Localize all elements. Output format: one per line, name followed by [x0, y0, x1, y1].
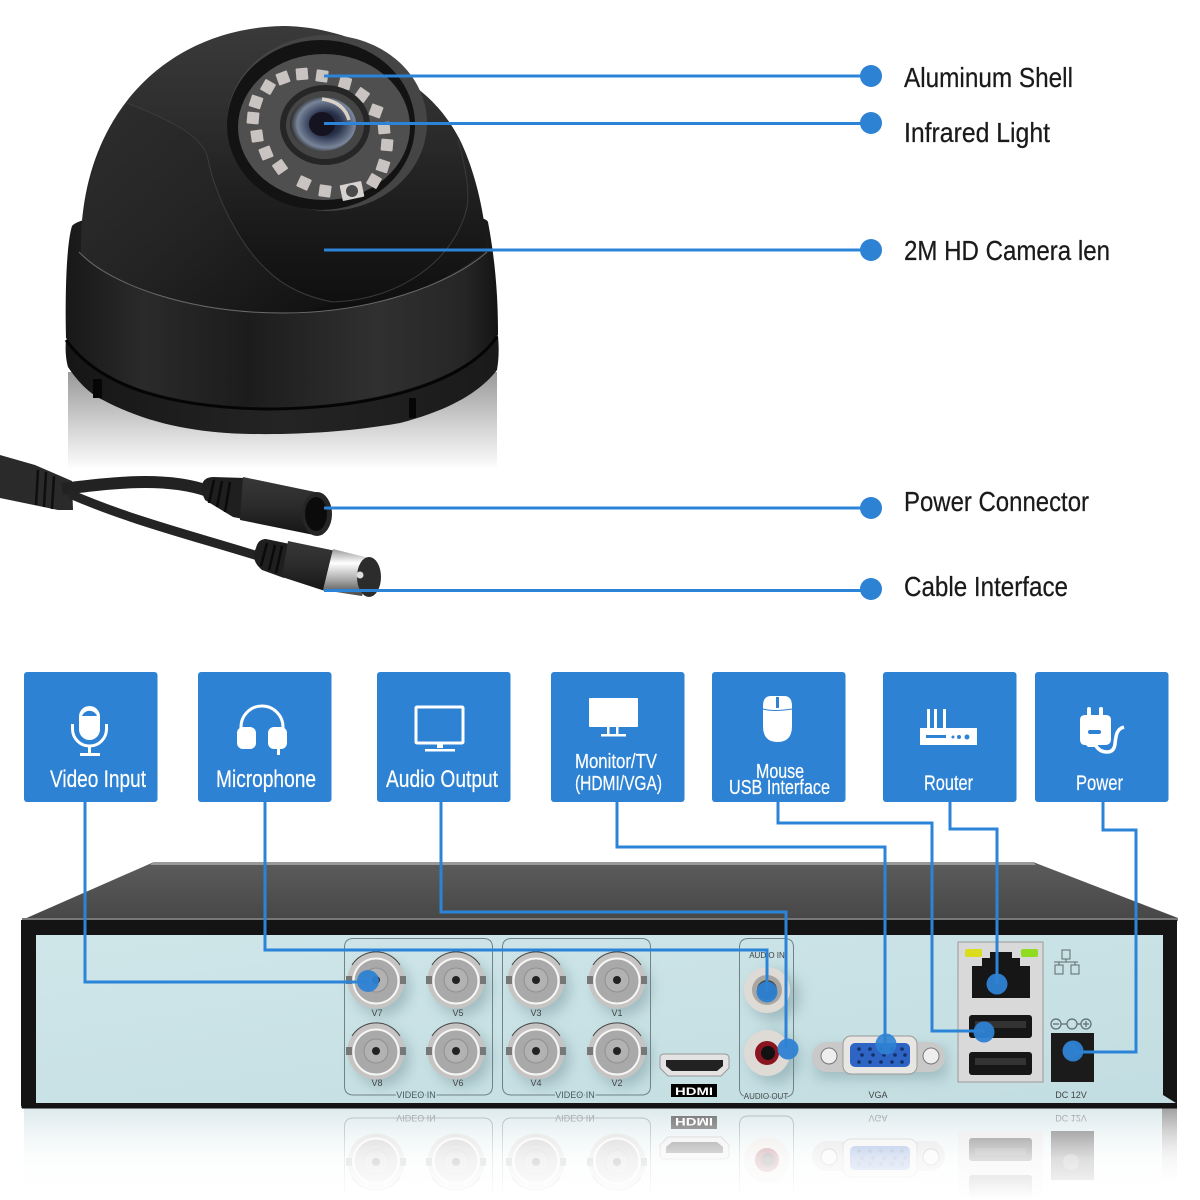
- DVR reflection: [21, 1106, 1177, 1190]
- camera base: [66, 336, 499, 434]
- DVR reflection: VIDEO IN: [555, 1113, 595, 1123]
- label: monitor/TV: Monitor/TV: [575, 751, 658, 773]
- DVR port labels: V8: [371, 1078, 383, 1088]
- camera lens: [280, 85, 370, 165]
- DVR lower ports: [344, 1014, 1094, 1097]
- DVR port labels: V3: [530, 1008, 542, 1018]
- panel: router: [883, 672, 1016, 802]
- power connector: [202, 477, 332, 536]
- panel: video input: [24, 672, 158, 802]
- BNC connector: [254, 539, 381, 597]
- camera infrared LEDs: [246, 67, 394, 198]
- DVR back panel: [36, 935, 1176, 1103]
- leader lines: [324, 76, 871, 590]
- DC polarity symbol: [1051, 1019, 1091, 1029]
- icon: headphones: [237, 706, 287, 755]
- label: camera lens: 2M HD Camera len: [904, 235, 1110, 266]
- DVR reflection: HDMI: [675, 1115, 713, 1127]
- panel: power: [1035, 672, 1168, 802]
- icon: plug: [1080, 707, 1124, 752]
- network icon: [1054, 950, 1079, 974]
- label: audio output: Audio Output: [386, 766, 498, 793]
- DVR port labels: HDMI: [675, 1086, 713, 1098]
- label: router: Router: [924, 772, 973, 795]
- label: mouse USB interface: Mouse: [756, 761, 804, 783]
- cable assembly: [0, 455, 381, 597]
- connection dots: [357, 970, 1084, 1062]
- DVR port labels: V1: [611, 1008, 623, 1018]
- DVR back frame: [21, 920, 1177, 1108]
- DVR port labels: VIDEO IN: [396, 1090, 436, 1100]
- panel: microphone: [198, 672, 332, 802]
- DVR upper ports: [344, 938, 1043, 1082]
- DVR port labels: V2: [611, 1078, 623, 1088]
- panel: monitor/TV: [551, 672, 684, 802]
- DVR port labels: AUDIO OUT: [744, 1092, 788, 1101]
- main cable: [0, 455, 73, 510]
- dome camera: [66, 26, 499, 434]
- label: power: Power: [1076, 772, 1123, 795]
- camera light sensor: [340, 181, 364, 201]
- label: video input: Video Input: [50, 766, 146, 793]
- DVR port labels: [371, 951, 1087, 1101]
- icon: solid monitor: [589, 698, 638, 736]
- DVR port labels: VGA: [868, 1090, 888, 1100]
- DVR port labels: AUDIO IN: [749, 951, 785, 960]
- camera dome: [81, 26, 485, 313]
- DVR reflection: DC 12V: [1055, 1113, 1087, 1123]
- DVR reflection: VIDEO IN: [396, 1113, 436, 1123]
- label: aluminum shell: Aluminum Shell: [904, 62, 1073, 93]
- DVR top face: [22, 862, 1178, 920]
- DVR reflection: VGA: [868, 1113, 888, 1123]
- label: mouse USB interface: USB Interface: [729, 777, 830, 799]
- connection wires: [85, 802, 1136, 1052]
- camera outer shell: [81, 103, 333, 313]
- BNC branch: [70, 494, 258, 556]
- panel: audio output: [377, 672, 510, 802]
- label: infrared light: Infrared Light: [904, 117, 1050, 148]
- panel: mouse USB interface: [712, 672, 846, 802]
- camera reflection: [68, 372, 497, 470]
- icon: outlined monitor: [416, 707, 463, 752]
- icon: router: [920, 709, 977, 745]
- DVR port labels: VIDEO IN: [555, 1090, 595, 1100]
- power branch: [62, 482, 208, 491]
- DVR port labels: V6: [452, 1078, 464, 1088]
- icon: mouse: [763, 696, 792, 742]
- icon: microphone: [72, 706, 106, 754]
- camera lens housing: [227, 35, 427, 211]
- DVR port labels: V4: [530, 1078, 542, 1088]
- DVR recorder: [21, 862, 1178, 1108]
- camera mounting tabs: [93, 379, 416, 418]
- DVR port labels: DC 12V: [1055, 1090, 1087, 1100]
- camera part labels: [904, 62, 1110, 602]
- DVR port labels: V7: [371, 1008, 383, 1018]
- label: microphone: Microphone: [216, 766, 316, 793]
- connector shadows: [354, 960, 946, 1086]
- label: monitor/TV: (HDMI/VGA): [575, 773, 662, 795]
- camera band: [66, 206, 498, 407]
- leader dots: [860, 65, 882, 600]
- DVR port labels: V5: [452, 1008, 464, 1018]
- label: cable interface: Cable Interface: [904, 571, 1068, 602]
- label: power connector: Power Connector: [904, 486, 1089, 517]
